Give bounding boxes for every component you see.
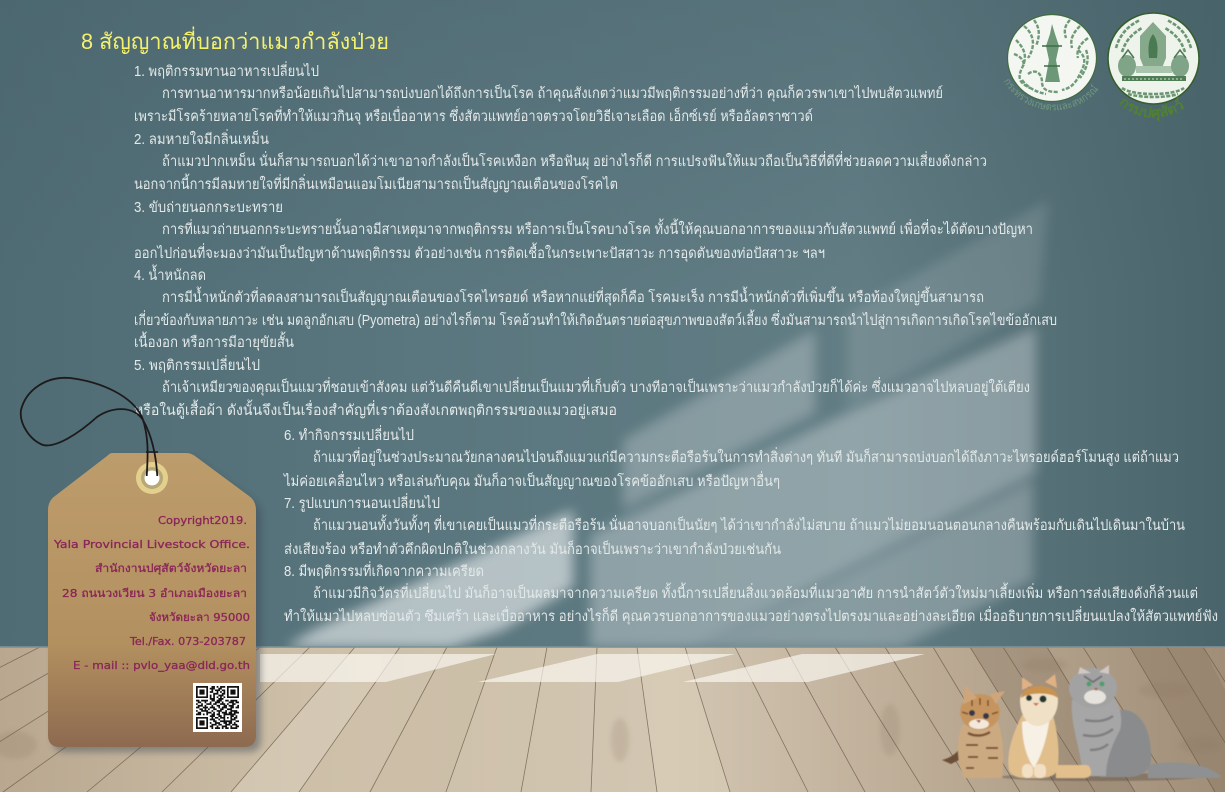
QR code bbox=[193, 683, 242, 732]
section 3: litter box bbox=[134, 200, 1033, 262]
contact text: Copyright2019. bbox=[158, 514, 247, 527]
section 1: eating behaviour: 1. พฤติกรรมทานอาหารเปลี่ยนไป bbox=[134, 61, 319, 80]
floor shadow under cats bbox=[1000, 773, 1200, 781]
cats illustration bbox=[942, 665, 1221, 781]
section 8: stress behaviour bbox=[284, 561, 1218, 625]
section 3: litter box: ออกไปก่อนที่จะมองว่ามันเป็นปัญหาด้านพฤติกรรม ตัวอย่างเช่น การติดเชื้อในกระเพาะปัสสาวะ การอุดตันของท่อปัสสาวะ ฯลฯ bbox=[134, 242, 825, 262]
section 2: bad breath: นอกจากนี้การมีลมหายใจที่มีกลิ่นเหมือนแอมโมเนียสามารถเป็นสัญญาณเตือนของโรคไต bbox=[134, 173, 618, 193]
section 4: weight loss: 4. น้ำหนักลด bbox=[134, 264, 206, 284]
section 6: activity change: 6. ทำกิจกรรมเปลี่ยนไป bbox=[284, 425, 414, 444]
tabby kitten bbox=[942, 685, 1005, 778]
section 7: sleep pattern: ส่งเสียงร้อง หรือทำตัวคึกผิดปกติในช่วงกลางวัน มันก็อาจเป็นเพราะว่าเขากำลังป่วยเช่นกัน bbox=[284, 539, 781, 558]
contact text: Tel./Fax. 073-203787 bbox=[129, 635, 246, 648]
tag shadow bbox=[53, 458, 261, 752]
contact text: สำนักงานปศุสัตว์จังหวัดยะลา bbox=[95, 562, 247, 575]
sunlight patches on floor bbox=[260, 654, 925, 682]
price tag panel bbox=[21, 378, 261, 752]
wooden floor bbox=[0, 646, 1225, 792]
section 8: stress behaviour: 8. มีพฤติกรรมที่เกิดจากความเครียด bbox=[284, 561, 484, 580]
string loop bbox=[21, 378, 157, 476]
seal caption: กรมปศุสัตว์ bbox=[1119, 97, 1184, 122]
eyelet bbox=[136, 462, 168, 494]
contact text: E - mail :: pvlo_yaa@dld.go.th bbox=[73, 659, 250, 672]
section 4: weight loss: การมีน้ำหนักตัวที่ลดลงสามารถเป็นสัญญาณเตือนของโรคไทรอยด์ หรือหากแย่ที่สุดก็คือ โรคมะเร็ง การมีน้ำหนักตัวที่เพิ่มขึ้น หรือท้องใหญ่ขึ้นสามารถ bbox=[162, 286, 984, 306]
section 1: eating behaviour: การทานอาหารมากหรือน้อยเกินไปสามารถบ่งบอกได้ถึงการเป็นโรค ถ้าคุณสังเกตว่าแมวมีพฤติกรรมอย่างที่ว่า คุณก็ควรพาเขาไปพบสัตวแพทย์ bbox=[162, 83, 943, 102]
tag body bbox=[48, 453, 256, 747]
grey cat bbox=[1069, 665, 1221, 778]
section 5: behaviour change: 5. พฤติกรรมเปลี่ยนไป bbox=[134, 355, 260, 374]
title: 8 สัญญาณที่บอกว่าแมวกำลังป่วย bbox=[81, 26, 389, 54]
section 3: litter box: 3. ขับถ่ายนอกกระบะทราย bbox=[134, 200, 283, 216]
section 6: activity change: ไม่ค่อยเคลื่อนไหว หรือเล่นกับคุณ มันก็อาจเป็นสัญญาณของโรคข้ออักเสบ หรือปัญหาอื่นๆ bbox=[283, 471, 780, 490]
section 2: bad breath: ถ้าแมวปากเหม็น นั่นก็สามารถบอกได้ว่าเขาอาจกำลังเป็นโรคเหงือก หรือฟันผุ อย่างไรก็ดี การแปรงฟันให้แมวถือเป็นวิธีที่ดีที่ช่วยลดความเสี่ยงดังกล่าว bbox=[162, 151, 987, 170]
contact text: 28 ถนนวงเวียน 3 อำเภอเมืองยะลา bbox=[62, 587, 247, 600]
section 4: weight loss bbox=[134, 264, 1057, 351]
section 6: activity change bbox=[283, 425, 1179, 490]
section 3: litter box: การที่แมวถ่ายนอกกระบะทรายนั้นอาจมีสาเหตุมาจากพฤติกรรม หรือการเป็นโรคบางโรค ทั้งนี้ให้คุณบอกอาการของแมวกับสัตวแพทย์ เพื่อที่จะได้ตัดบางปัญหา bbox=[162, 218, 1033, 238]
section 5: behaviour change: ถ้าเจ้าเหมียวของคุณเป็นแมวที่ชอบเข้าสังคม แต่วันดีคืนดีเขาเปลี่ยนเป็นแมวที่เก็บตัว บางทีอาจเป็นเพราะว่าแมวกำลังป่วยก็ได้ค่ะ ซึ่งแมวอาจไปหลบอยู่ใต้เตียง bbox=[162, 377, 1030, 396]
logo: Department of Livestock seal bbox=[1107, 12, 1200, 122]
section 2: bad breath: 2. ลมหายใจมีกลิ่นเหม็น bbox=[134, 129, 269, 148]
section 2: bad breath bbox=[134, 129, 987, 193]
section 1: eating behaviour bbox=[134, 61, 943, 125]
contact text: Yala Provincial Livestock Office. bbox=[53, 538, 250, 551]
contact text bbox=[53, 514, 250, 672]
section 7: sleep pattern: 7. รูปแบบการนอนเปลี่ยนไป bbox=[284, 493, 440, 512]
section 4: weight loss: เกี่ยวข้องกับหลายภาวะ เช่น มดลูกอักเสบ (Pyometra) อย่างไรก็ตาม โรคอ้วนทำให้เกิดอันตรายต่อสุขภาพของสัตว์เลี้ยง ซึ่งมันสามารถนำไปสู่การเกิดการเกิดโรคไขข้ออักเสบ bbox=[134, 309, 1057, 329]
golden cat bbox=[1008, 674, 1091, 778]
section 1: eating behaviour: เพราะมีโรคร้ายหลายโรคที่ทำให้แมวกินจุ หรือเบื่ออาหาร ซึ่งสัตวแพทย์อาจตรวจโดยวิธีเจาะเลือด เอ็กซ์เรย์ หรืออัลตราซาวด์ bbox=[134, 106, 813, 125]
window light on wall bbox=[285, 200, 1048, 648]
section 5: behaviour change bbox=[134, 355, 1030, 419]
logo: Ministry of Agriculture seal bbox=[1004, 14, 1098, 110]
section 7: sleep pattern bbox=[284, 493, 1185, 558]
section 4: weight loss: เนื้องอก หรือการมีอายุขัยสั้น bbox=[134, 331, 294, 351]
seal caption: กระทรวงเกษตรและสหกรณ์ bbox=[1004, 79, 1098, 110]
section 5: behaviour change: หรือในตู้เสื้อผ้า ดังนั้นจึงเป็นเรื่องสำคัญที่เราต้องสังเกตพฤติกรรมของแมวอยู่เสมอ bbox=[134, 399, 617, 419]
contact text: จังหวัดยะลา 95000 bbox=[149, 611, 250, 624]
